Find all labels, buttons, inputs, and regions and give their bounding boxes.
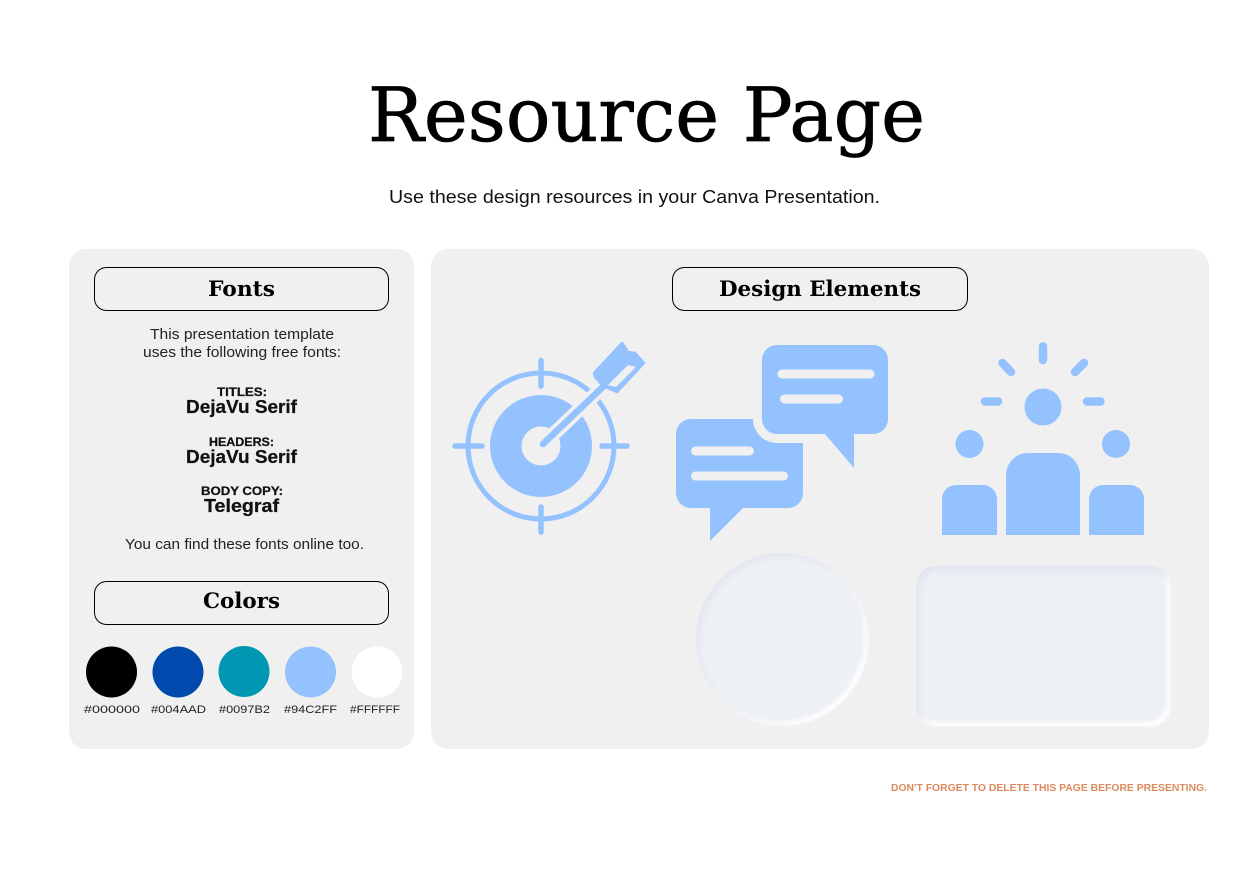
swatch: teal [218,646,270,716]
swatch: blue [151,646,206,716]
swatch: black [84,646,140,716]
title: Resource Page [368,72,925,159]
text: titles font [186,385,298,417]
text: headers font: HEADERS: [209,435,274,449]
text: headers font: DejaVu Serif [186,447,298,467]
swatch: white: #FFFFFF [350,704,400,716]
text: font intro: This presentation template [150,326,334,343]
heading: colors [94,582,388,624]
heading: design elements: Design Elements [719,277,921,302]
swatch: light blue: #94C2FF [284,704,337,716]
text: body copy font: Telegraf [204,496,280,516]
heading: colors: Colors [203,589,280,614]
swatch: light blue [284,646,337,716]
panel: design elements [431,249,1209,749]
text: titles font: DejaVu Serif [186,397,298,417]
swatch: white [350,646,402,716]
text: body copy font [201,484,283,516]
swatch: blue: #004AAD [151,704,206,716]
text: fonts online note: You can find these fonts online too. [125,536,364,553]
text: font intro [143,326,341,361]
text: titles font: TITLES: [217,385,267,399]
icon: target with arrow [455,343,644,532]
heading: design elements [672,268,968,310]
panel: fonts and colors [69,249,414,749]
placeholder: inset rectangle [916,566,1170,726]
text: body copy font: BODY COPY: [201,484,283,498]
icon: chat bubbles [676,345,888,541]
text: font intro: uses the following free fonts: [143,344,341,361]
text: headers font [186,435,298,467]
swatch: black: #000000 [84,704,140,716]
heading: fonts: Fonts [208,277,275,302]
placeholder: inset circle [696,553,868,725]
icon: team with idea [942,346,1144,535]
swatch: teal: #0097B2 [219,704,270,716]
subtitle: Use these design resources in your Canva Presentation. [389,187,880,207]
footer note: DON'T FORGET TO DELETE THIS PAGE BEFORE PRESENTING. [891,783,1207,794]
heading: fonts [94,268,388,310]
